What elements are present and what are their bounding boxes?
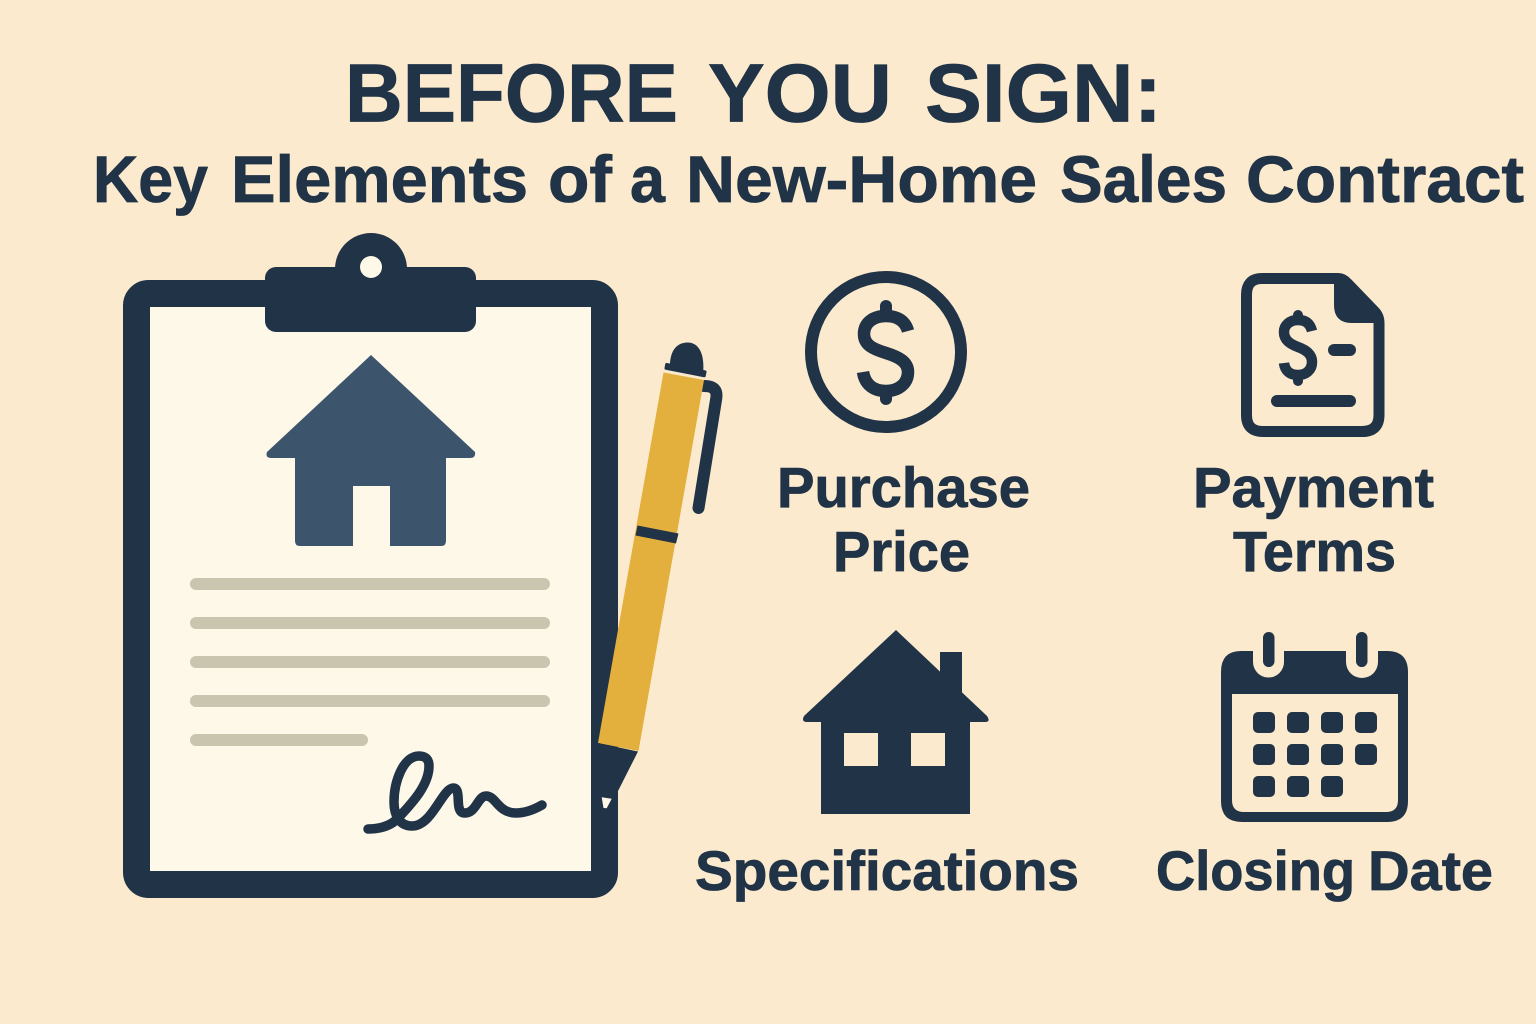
clipboard illustration xyxy=(136,233,604,884)
item: payment terms xyxy=(1193,278,1434,584)
label: purchase price: Price xyxy=(833,520,970,584)
subtitle: Sales xyxy=(1060,142,1227,216)
icon: dollar coin xyxy=(811,277,961,427)
label: closing date: Date xyxy=(1368,839,1493,902)
subtitle: Contract xyxy=(1246,142,1524,216)
signature xyxy=(368,756,542,829)
icon: house with chimney xyxy=(803,630,989,814)
item: purchase price xyxy=(777,277,1030,584)
subtitle: Elements xyxy=(231,142,528,216)
icon: calendar xyxy=(1221,632,1408,822)
contract text lines xyxy=(190,578,550,746)
item: closing date xyxy=(1156,632,1493,902)
label: payment terms: Payment xyxy=(1193,456,1434,520)
pen tip xyxy=(598,743,638,812)
icon: house on contract xyxy=(266,355,475,546)
subtitle: Key xyxy=(93,142,208,216)
pen clip xyxy=(698,386,716,508)
pen cap xyxy=(670,342,703,374)
label: payment terms xyxy=(1193,456,1434,584)
title xyxy=(345,46,1162,140)
subtitle: a xyxy=(630,142,666,216)
icon: pen xyxy=(598,342,716,812)
label: payment terms: Terms xyxy=(1233,520,1396,584)
label: closing date xyxy=(1156,839,1493,902)
label: specifications: Specifications xyxy=(695,839,1079,902)
label: purchase price: Purchase xyxy=(777,456,1030,520)
title: YOU xyxy=(708,46,892,140)
subtitle xyxy=(93,142,1524,216)
label: purchase price xyxy=(777,456,1030,584)
clipboard board xyxy=(136,294,604,884)
item: specifications xyxy=(695,630,1079,902)
subtitle: New-Home xyxy=(686,142,1037,216)
pen barrel xyxy=(598,372,704,751)
label: closing date: Closing xyxy=(1156,839,1355,902)
title: SIGN: xyxy=(925,46,1162,140)
clipboard clip xyxy=(265,233,476,332)
pen band xyxy=(636,526,678,544)
icon: payment document xyxy=(1246,278,1382,432)
title: BEFORE xyxy=(345,46,678,140)
subtitle: of xyxy=(548,142,613,216)
